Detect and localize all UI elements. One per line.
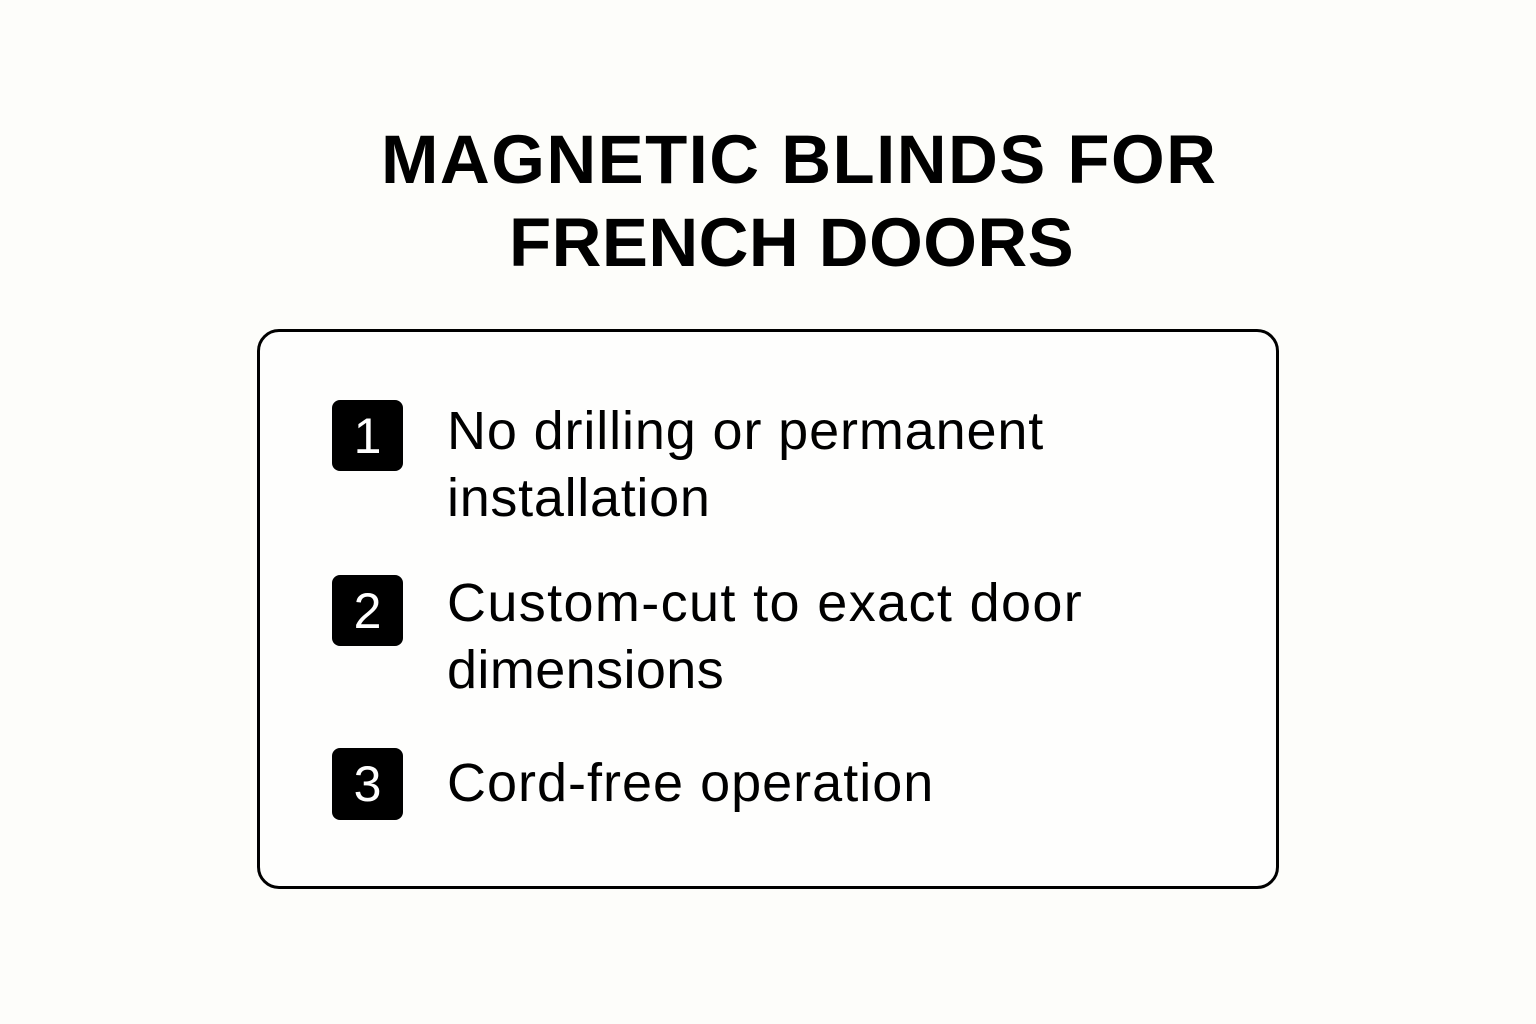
item 2 number badge: 2 [354, 583, 381, 639]
item 3 number badge: 3 [354, 756, 381, 812]
item 1 text: No drilling or permanent [447, 401, 1044, 461]
item 1 text: installation [447, 468, 711, 528]
item 1 number badge: 1 [354, 408, 381, 464]
item 2 number badge [332, 575, 403, 646]
title: MAGNETIC BLINDS FOR [381, 121, 1217, 198]
item 2 text: Custom-cut to exact door [447, 573, 1083, 633]
title [381, 121, 1217, 281]
panel: features list [257, 329, 1279, 889]
title: FRENCH DOORS [509, 204, 1074, 281]
item 2 text: dimensions [447, 640, 724, 700]
item 3 number badge [332, 748, 403, 820]
item 1 number badge [332, 400, 403, 471]
item 2 text [447, 573, 1083, 700]
item 1 text [447, 401, 1044, 528]
item 3 text: Cord-free operation [447, 753, 934, 813]
